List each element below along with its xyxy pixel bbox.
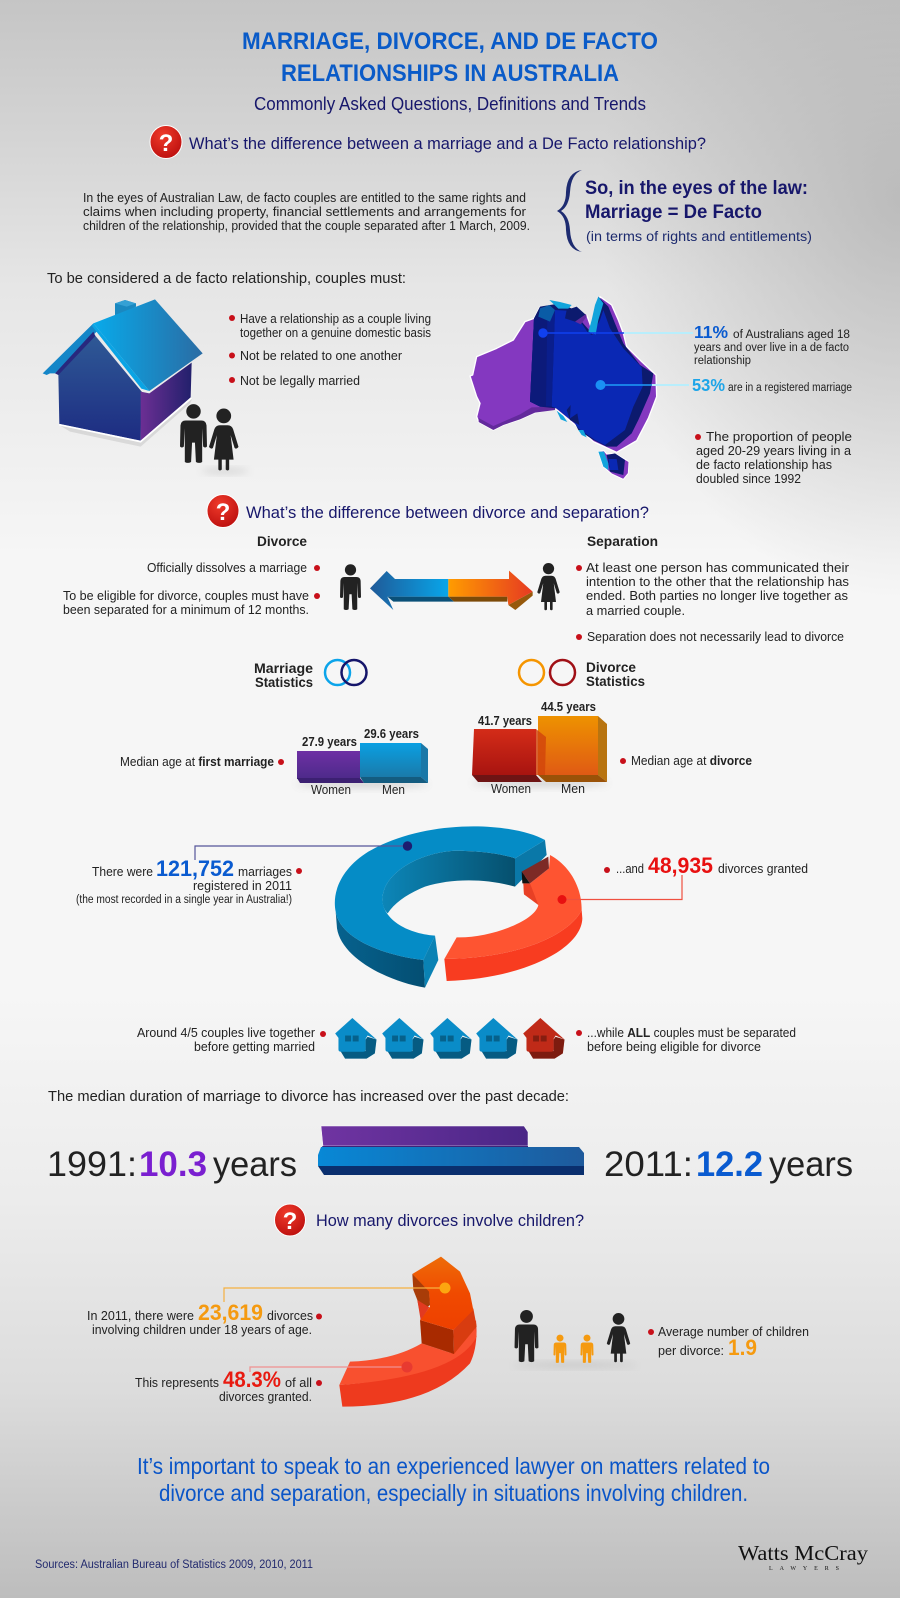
separation column: a married couple. [586,604,685,618]
chart: marriage median age: Women [311,783,351,797]
callout: 53% married [596,375,852,395]
label: 1991 duration: 1991: [47,1145,137,1184]
chart: marriages vs divorces ring [335,826,582,988]
sources: Sources: Australian Bureau of Statistics 2009, 2010, 2011 [35,1559,313,1571]
question two heading: What’s the difference between divorce and separation? [246,503,649,522]
paragraph: law: children of the relationship, provided that the couple separated after 1 March, 2009. [83,219,530,233]
divorce column: Officially dissolves a marriage [147,561,307,575]
separation column: Separation [587,533,658,549]
callout: marriage equals de facto [585,178,812,244]
chart: marriage median age: 27.9 years [302,735,357,749]
callout: marriages registered: There were [92,865,153,879]
text: proportion doubled: aged 20-29 years living in a [696,444,851,458]
text: live together: before getting married [194,1040,315,1054]
heading: divorce statistics: Divorce [586,659,636,675]
icon: question mark [207,494,239,528]
callout: marriages registered: registered in 2011 [193,879,292,893]
list: criteria: together on a genuine domestic basis [240,326,431,340]
question one heading: What’s the difference between a marriage and a De Facto relationship? [189,134,706,153]
callout: 11% de facto: 11% [694,322,728,342]
callout: divorces involving children [87,1282,450,1337]
icon: question mark: ? [159,130,173,157]
callout: 53% married: 53% [692,375,725,395]
text: proportion doubled: de facto relationship has [696,458,832,472]
label: 1991 duration: years [213,1145,297,1184]
title [242,28,658,87]
closing statement: It’s important to speak to an experienced lawyer on matters related to [137,1453,770,1479]
callout: marriages registered: 121,752 [156,856,234,881]
icon: question mark [274,1204,306,1236]
callout: 11% de facto: relationship [694,355,751,367]
label: 1991 duration [47,1145,297,1184]
separation column: ended. Both parties no longer live together as [586,589,848,603]
icon: question mark [150,126,182,158]
paragraph: law [83,191,530,233]
callout: marriage equals de facto: Marriage = De Facto [585,202,762,223]
heading: marriage statistics: Marriage [254,660,313,676]
separation column: intention to the other that the relationship has [586,575,849,589]
chart: marriage median age: Men [382,783,405,797]
callout: divorces involving children: In 2011, there were [87,1309,194,1323]
chart: divorce median age: 44.5 years [541,700,596,714]
list: criteria: Not be related to one another [240,349,402,363]
callout: 11% de facto [538,322,850,367]
question three heading: How many divorces involve children? [316,1212,584,1230]
text: average children [648,1325,809,1360]
callout: 48.3% of divorces [135,1362,412,1404]
icon: house [43,299,203,447]
logo: Watts McCray Lawyers: Watts McCray [738,1541,869,1565]
callout: marriages registered [76,841,412,906]
callout: divorces granted: 48,935 [648,853,713,878]
text: live together [137,1026,326,1054]
callout: 11% de facto: of Australians aged 18 [733,329,850,341]
callout: 48.3% of divorces: 48.3% [223,1367,281,1392]
chart: marriage median age [296,727,428,797]
divorce column: To be eligible for divorce, couples must have [63,589,309,603]
label: 2011 duration: years [769,1145,853,1184]
text: proportion doubled [695,430,852,486]
text: all couples separated [576,1026,796,1054]
icon: question mark: ? [283,1208,297,1235]
text: proportion doubled: doubled since 1992 [696,472,801,486]
text: all couples separated: ...while ALL couples must be separated [587,1026,796,1040]
heading: marriage statistics: Statistics [255,674,313,690]
arrow: divorce to separation [370,571,533,610]
text: average children: 1.9 [728,1335,757,1360]
heading: divorce statistics: Statistics [586,673,645,689]
heading: marriage statistics [254,660,313,690]
heading: divorce statistics [586,659,645,689]
list: criteria: Not be legally married [240,374,360,388]
label: 2011 duration [604,1145,853,1184]
chart: duration bars [318,1126,584,1175]
list: criteria: Have a relationship as a couple living [240,312,431,326]
text: proportion doubled: The proportion of people [706,430,852,444]
icon: family [513,1310,637,1367]
callout: 48.3% of divorces: of all [285,1376,312,1390]
map: Tasmania [598,451,629,479]
chart: children partial ring [339,1257,477,1407]
list: criteria [229,312,431,388]
divorce column [63,533,320,617]
map: Australia [470,297,657,479]
callout: divorces involving children: involving children under 18 years of age. [92,1323,312,1337]
callout: marriage equals de facto: So, in the eyes of the law: [585,178,808,199]
title: RELATIONSHIPS IN AUSTRALIA [281,60,619,87]
icon: divorce rings [519,660,575,685]
heading: de facto criteria: To be considered a de facto relationship, couples must: [47,271,406,287]
text: live together: Around 4/5 couples live together [137,1026,315,1040]
question one heading [150,126,706,158]
icon: man [340,564,361,610]
subtitle: Commonly Asked Questions, Definitions and Trends [254,93,646,114]
icon: couple [180,404,249,473]
separation column: At least one person has communicated their [586,561,849,575]
closing statement [137,1453,770,1506]
question three heading [274,1204,584,1236]
callout: 53% married: are in a registered marriage [728,382,852,394]
chart: divorce median age: 41.7 years [478,714,532,728]
chart: divorce median age [472,700,608,796]
separation column [576,533,849,644]
text: average children: per divorce: [658,1344,724,1358]
separation column: Separation does not necessarily lead to divorce [587,630,844,644]
callout: marriages registered: marriages [238,865,292,879]
label: median age first marriage: Median age at first marriage [120,755,274,769]
icon: marriage rings [325,660,366,685]
chart: marriage median age: 29.6 years [364,727,419,741]
text: average children: Average number of children [658,1325,809,1339]
label: 1991 duration: 10.3 [139,1145,207,1184]
question two heading [207,494,649,528]
paragraph: law: claims when including property, financial settlements and arrangements for [83,205,526,219]
heading: median duration: The median duration of marriage to divorce has increased over the past decade: [48,1089,569,1105]
closing statement: divorce and separation, especially in situations involving children. [159,1480,748,1506]
paragraph: law: In the eyes of Australian Law, de facto couples are entitled to the same rights and [83,191,526,205]
callout: divorces granted: divorces granted [718,862,808,876]
callout: divorces involving children: divorces [267,1309,313,1323]
callout: divorces granted [558,853,808,904]
callout: divorces involving children: 23,619 [198,1300,263,1325]
divorce column: been separated for a minimum of 12 months. [63,603,309,617]
chart: divorce median age: Women [491,782,531,796]
icon: woman [537,563,560,610]
icons: five houses [335,1018,565,1059]
callout: divorces granted: ...and [616,862,644,876]
text: all couples separated: before being eligible for divorce [587,1040,761,1054]
label: median age divorce: Median age at divorce [631,754,752,768]
callout: 11% de facto: years and over live in a de facto [694,342,849,354]
icon: question mark: ? [216,499,230,526]
logo: Watts McCray Lawyers: LAWYERS [769,1566,839,1572]
divorce column: Divorce [257,533,307,549]
label: 2011 duration: 2011: [604,1145,693,1184]
title: MARRIAGE, DIVORCE, AND DE FACTO [242,28,658,55]
label: 2011 duration: 12.2 [696,1145,763,1184]
callout: 48.3% of divorces: This represents [135,1376,219,1390]
brace [557,170,582,252]
callout: marriages registered: (the most recorded in a single year in Australia!) [76,894,292,906]
callout: 48.3% of divorces: divorces granted. [219,1390,312,1404]
callout: marriage equals de facto: (in terms of rights and entitlements) [586,229,812,244]
chart: divorce median age: Men [561,782,585,796]
